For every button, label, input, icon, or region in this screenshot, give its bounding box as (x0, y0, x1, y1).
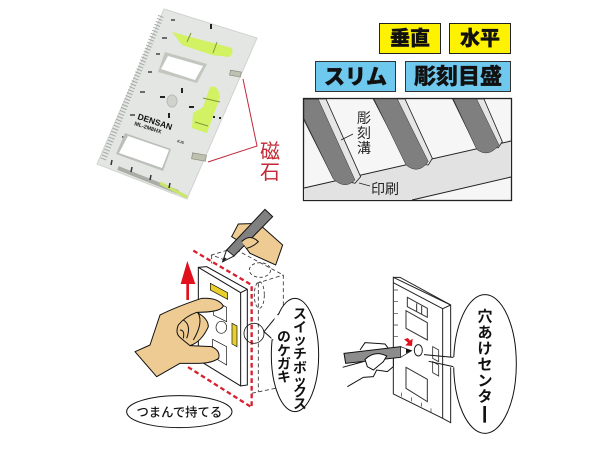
groove label leader (341, 134, 370, 186)
red up arrow (181, 261, 195, 300)
hand (343, 343, 393, 387)
callout bubble: switch box marking: ス (293, 306, 307, 321)
feature badge: horizontal (450, 24, 510, 54)
magnet label: 石 (260, 162, 280, 184)
callout bubble: hole centre: タ (477, 389, 492, 406)
brand text: DENSAN (136, 111, 174, 132)
groove 1 (304, 99, 361, 185)
print label: 印刷 (371, 181, 399, 197)
feature badge: vertical (380, 24, 440, 54)
callout bubble: switch box marking: イ (293, 320, 307, 335)
callout bubble: hole centre: あ (477, 325, 492, 342)
magnet callout lines (208, 79, 257, 162)
red marker arrow (404, 338, 413, 346)
black marks (160, 24, 220, 119)
callout bubble: hole centre: セ (477, 357, 492, 374)
groove label (357, 110, 371, 156)
printed band (304, 141, 511, 200)
pencil (223, 209, 273, 262)
feature badge: vertical: 垂直 (390, 26, 430, 50)
feature badge: slim: スリム (324, 66, 387, 89)
callout bubble: hole centre: 穴 (477, 309, 492, 326)
callout bubble: switch box marking: ス (293, 396, 307, 411)
green vials (172, 32, 233, 57)
windows (158, 52, 207, 83)
feature badge: slim (316, 62, 396, 92)
callout: hold by pinching: つまんで持てる (136, 404, 222, 419)
product photo: level card (97, 9, 257, 199)
groove label: 彫 (357, 110, 371, 126)
product photo: level card: ML-2M8HX (133, 121, 162, 136)
callout bubble: hole centre: け (477, 341, 492, 358)
ruler edges (103, 16, 161, 160)
illustration: hole centre marking (343, 277, 516, 433)
groove label: 刻 (357, 125, 371, 141)
groove 3 (453, 99, 502, 153)
red dashed frame (187, 251, 252, 407)
feature badge: engraved scale: 彫刻目盛 (414, 64, 502, 89)
writing hand (232, 223, 283, 265)
illustration: marking switch box (127, 209, 319, 428)
magnet label: 磁 (260, 140, 280, 163)
callout bubble: switch box marking (244, 298, 319, 412)
callout bubble: switch box marking: チ (293, 346, 307, 361)
callout bubble: switch box marking: ケ (277, 343, 291, 358)
callout bubble: switch box marking: ク (293, 385, 307, 400)
curled fingers (177, 312, 200, 346)
level card (393, 277, 451, 423)
feature badge: horizontal: 水平 (460, 27, 500, 50)
hand holding card (135, 298, 223, 377)
callout: hold by pinching (127, 396, 232, 428)
callout bubble: switch box marking: ボ (293, 360, 307, 375)
magnets (230, 70, 241, 77)
callout bubble: switch box marking: の (277, 330, 291, 345)
dashed switch box outline (212, 248, 283, 393)
magnet label (260, 140, 280, 184)
groove 2 (373, 99, 432, 169)
centre hole (167, 95, 177, 107)
product photo: level card: KJS (177, 139, 185, 145)
panel: engraved groove diagram (304, 98, 512, 200)
callout bubble: hole centre (424, 295, 516, 433)
yellow vials (210, 283, 228, 299)
callout bubble: switch box marking: ッ (293, 333, 307, 348)
level card (198, 267, 247, 386)
card windows (407, 297, 427, 317)
callout bubble: switch box marking: ッ (293, 373, 307, 388)
callout bubble: switch box marking: キ (277, 369, 291, 384)
pencil (344, 347, 407, 363)
callout bubble: hole centre: ン (477, 373, 492, 390)
feature badge: engraved scale (406, 62, 510, 92)
callout bubble: switch box marking: ガ (277, 356, 291, 371)
groove label: 溝 (357, 140, 371, 156)
